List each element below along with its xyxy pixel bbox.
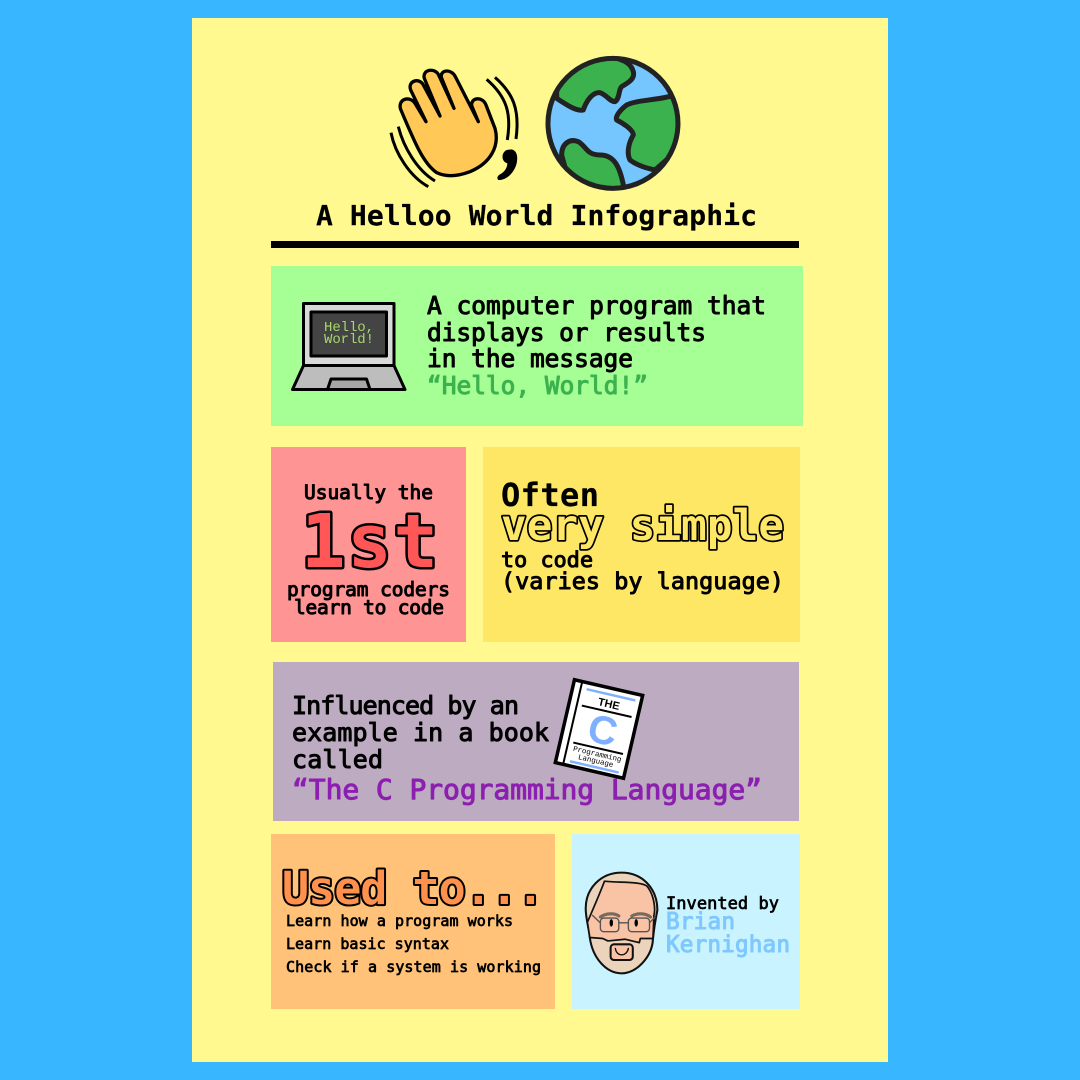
big 1st: 1st	[301, 499, 438, 585]
influenced text: Influenced by an	[292, 691, 519, 720]
title: A Helloo World Infographic	[316, 199, 757, 232]
influenced text: “The C Programming Language”	[292, 773, 762, 806]
yellow poster sheet	[192, 18, 888, 1062]
icon: laptop	[292, 304, 405, 390]
often very simple text: (varies by language)	[501, 567, 784, 595]
icon: C book: Language	[577, 754, 614, 770]
icon: globe	[548, 57, 682, 190]
infographic canvas	[192, 18, 888, 1062]
list of uses: Check if a system is working	[286, 958, 541, 976]
list of uses: Learn basic syntax	[286, 935, 449, 953]
definition text: in the message	[427, 344, 633, 373]
influenced text	[292, 691, 762, 806]
icon: C book: Programming	[572, 746, 622, 765]
laptop screen text: World!	[324, 332, 374, 348]
inventor name: Invented by	[666, 894, 779, 914]
icon: C book	[555, 680, 643, 778]
inventor name: Kernighan	[666, 932, 790, 958]
panel: very simple	[483, 447, 800, 642]
often very simple text: to code	[501, 548, 593, 573]
list of uses: Learn how a program works	[286, 912, 513, 930]
header icons	[391, 57, 682, 190]
laptop screen text: Hello,	[324, 320, 374, 336]
label: program coders learn to code	[287, 578, 450, 619]
often very simple text: Often	[501, 476, 599, 514]
label: program coders learn to code: program coders	[287, 578, 450, 601]
influenced text: called	[292, 745, 383, 774]
icon: waving hand	[391, 70, 517, 187]
title rule	[271, 241, 799, 248]
often very simple text: very simple	[501, 502, 784, 551]
list of uses	[286, 912, 541, 976]
panel: usually the 1st	[271, 447, 466, 642]
definition text: A computer program that	[427, 291, 766, 320]
influenced text: example in a book	[292, 718, 549, 747]
often very simple text	[501, 476, 784, 595]
laptop screen text	[324, 320, 374, 348]
panel: influenced by book	[273, 662, 799, 821]
icon: comma	[497, 149, 517, 180]
inventor name	[666, 894, 790, 958]
inventor name: Brian	[666, 909, 735, 935]
icon: Brian Kernighan face	[586, 873, 657, 973]
panel: used to	[271, 834, 555, 1009]
panel: definition	[271, 266, 803, 426]
icon: C book: THE	[597, 696, 621, 713]
definition text: “Hello, World!”	[427, 371, 648, 400]
label: usually the: Usually the	[304, 481, 433, 504]
heading: used to: Used to...	[282, 862, 544, 915]
definition text	[427, 291, 766, 400]
label: program coders learn to code: learn to code	[294, 596, 444, 619]
panel: inventor	[572, 834, 800, 1009]
definition text: displays or results	[427, 318, 706, 347]
icon: C book: C	[584, 706, 622, 756]
